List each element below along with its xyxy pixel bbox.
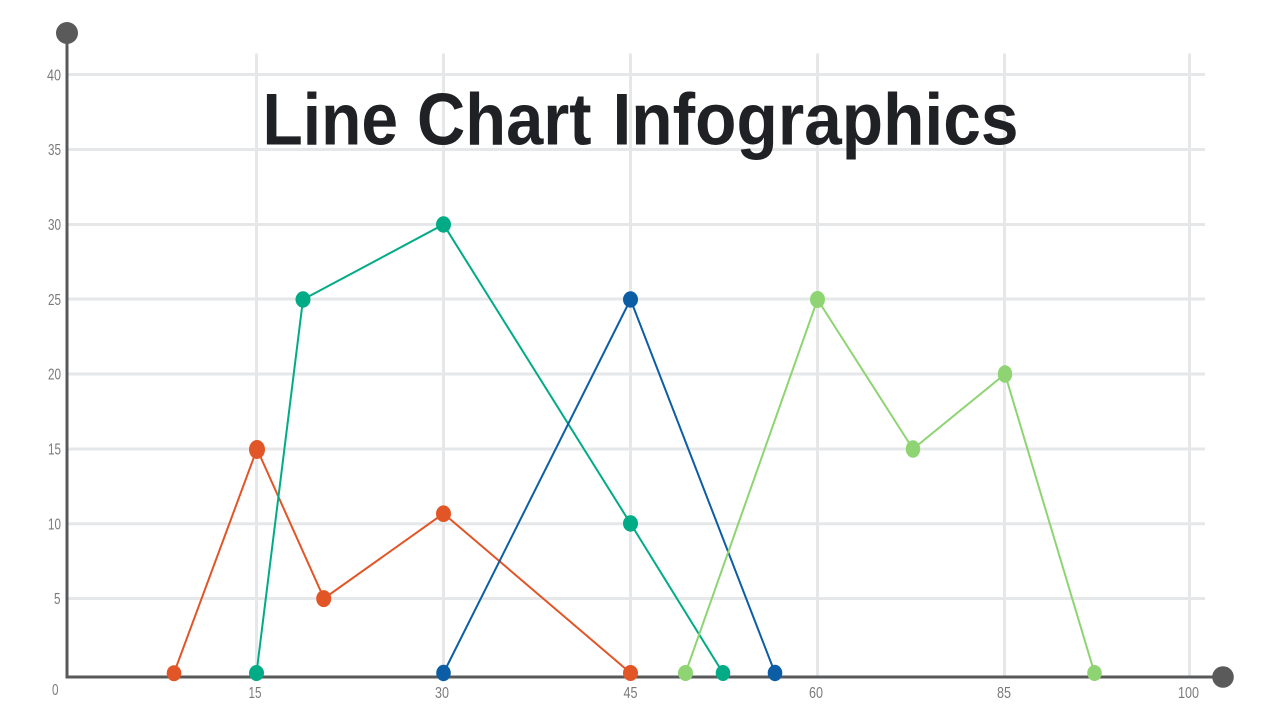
x axis labels: 85 (997, 685, 1011, 702)
y axis labels: 0 (52, 682, 59, 699)
series: green (678, 291, 1102, 681)
series: teal (249, 216, 730, 681)
title: Line (262, 80, 398, 160)
y axis labels: 10 (48, 516, 61, 534)
x axis labels (248, 685, 1199, 702)
y axis labels: 25 (48, 292, 61, 309)
y axis labels: 30 (48, 217, 61, 234)
y axis labels (47, 68, 61, 699)
y axis labels: 40 (47, 68, 61, 84)
series: orange (167, 440, 638, 681)
title: Chart (417, 80, 592, 160)
y axis labels: 20 (48, 366, 61, 384)
x axis labels: 60 (809, 685, 823, 702)
x axis labels: 100 (1178, 685, 1199, 702)
y axis labels: 5 (54, 591, 60, 608)
x axis labels: 45 (624, 685, 638, 702)
x axis labels: 15 (248, 685, 262, 702)
y axis labels: 35 (48, 142, 61, 159)
x axis labels: 30 (435, 685, 449, 702)
title: Infographics (612, 80, 1018, 160)
series: blue (436, 291, 782, 681)
y axis labels: 15 (48, 442, 61, 458)
title (262, 80, 1018, 160)
